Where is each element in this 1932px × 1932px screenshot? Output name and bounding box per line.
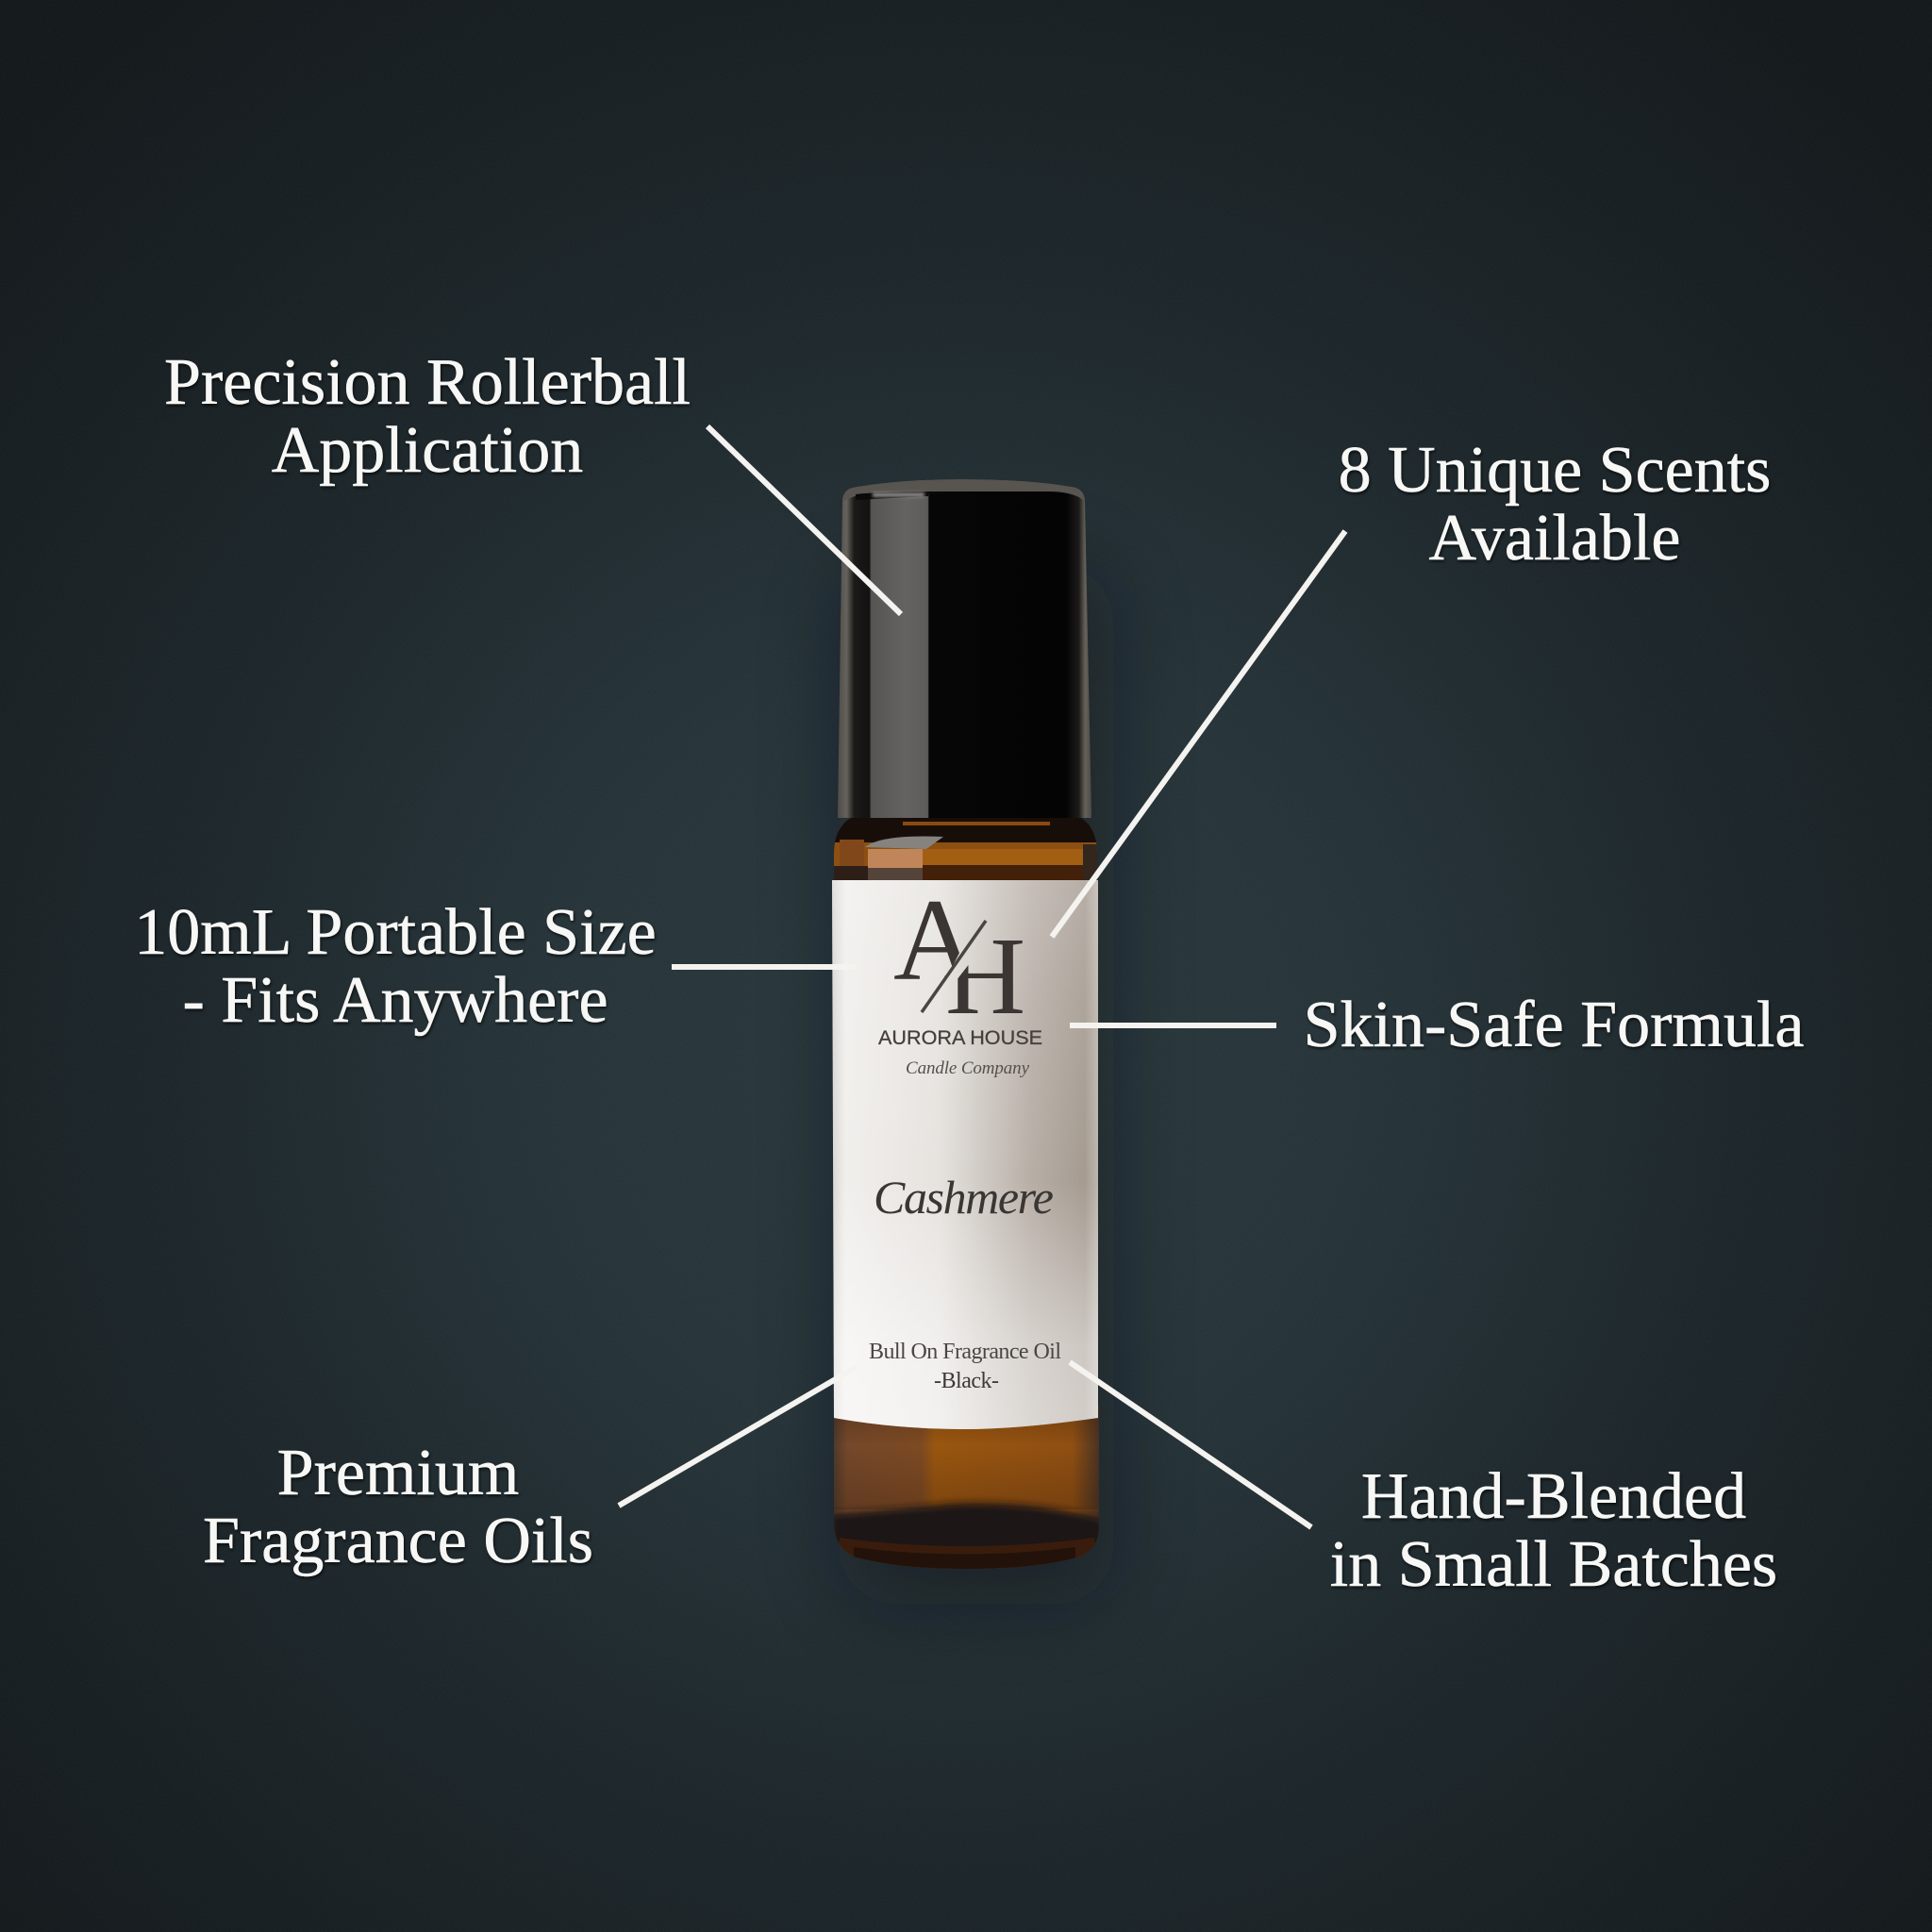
callout text: Skin-Safe Formula bbox=[1304, 989, 1804, 1061]
scent name: Cashmere bbox=[874, 1171, 1054, 1224]
callout: 10mL Portable Size bbox=[134, 896, 856, 1037]
leader line bbox=[1070, 1362, 1311, 1527]
brand name: AURORA HOUSE bbox=[878, 1027, 1042, 1049]
variant: -Black- bbox=[934, 1369, 999, 1393]
callout: 8 Unique Scents Available bbox=[1052, 434, 1771, 937]
callout: Hand-Blended in Small Batches bbox=[1070, 1362, 1777, 1601]
leader line bbox=[708, 426, 901, 614]
callout: Premium Fragrance Oils bbox=[203, 1367, 857, 1577]
callout text: Application bbox=[272, 414, 583, 487]
callout text: 8 Unique Scents bbox=[1339, 434, 1771, 507]
product type: Bull On Fragrance Oil bbox=[869, 1340, 1061, 1364]
callout text: Available bbox=[1429, 502, 1680, 575]
leader line bbox=[1052, 531, 1345, 937]
white label bbox=[832, 875, 1098, 1429]
black cap bbox=[838, 479, 1091, 818]
product bottle bbox=[830, 479, 1113, 1604]
amber glass neck bbox=[830, 818, 1104, 880]
leader line bbox=[1070, 1023, 1276, 1028]
callout: Precision Rollerball Application bbox=[164, 346, 901, 614]
callout text: Precision Rollerball bbox=[164, 346, 691, 419]
callout text: 10mL Portable Size bbox=[134, 896, 657, 969]
oil sediment shade bbox=[830, 1503, 1104, 1557]
callout text: Fragrance Oils bbox=[203, 1505, 593, 1577]
leader line bbox=[619, 1367, 857, 1506]
AH monogram: A bbox=[893, 875, 978, 1005]
lower amber glass with oil bbox=[830, 1406, 1104, 1575]
bottle shadow bbox=[840, 566, 1113, 1604]
callout text: Hand-Blended bbox=[1361, 1460, 1746, 1533]
callout text: in Small Batches bbox=[1330, 1528, 1777, 1601]
leader line bbox=[672, 964, 856, 970]
company line: Candle Company bbox=[906, 1058, 1030, 1078]
callout text: - Fits Anywhere bbox=[182, 964, 608, 1037]
AH monogram: H bbox=[945, 914, 1025, 1038]
callout text: Premium bbox=[277, 1437, 519, 1509]
AH monogram bbox=[894, 902, 1023, 1013]
